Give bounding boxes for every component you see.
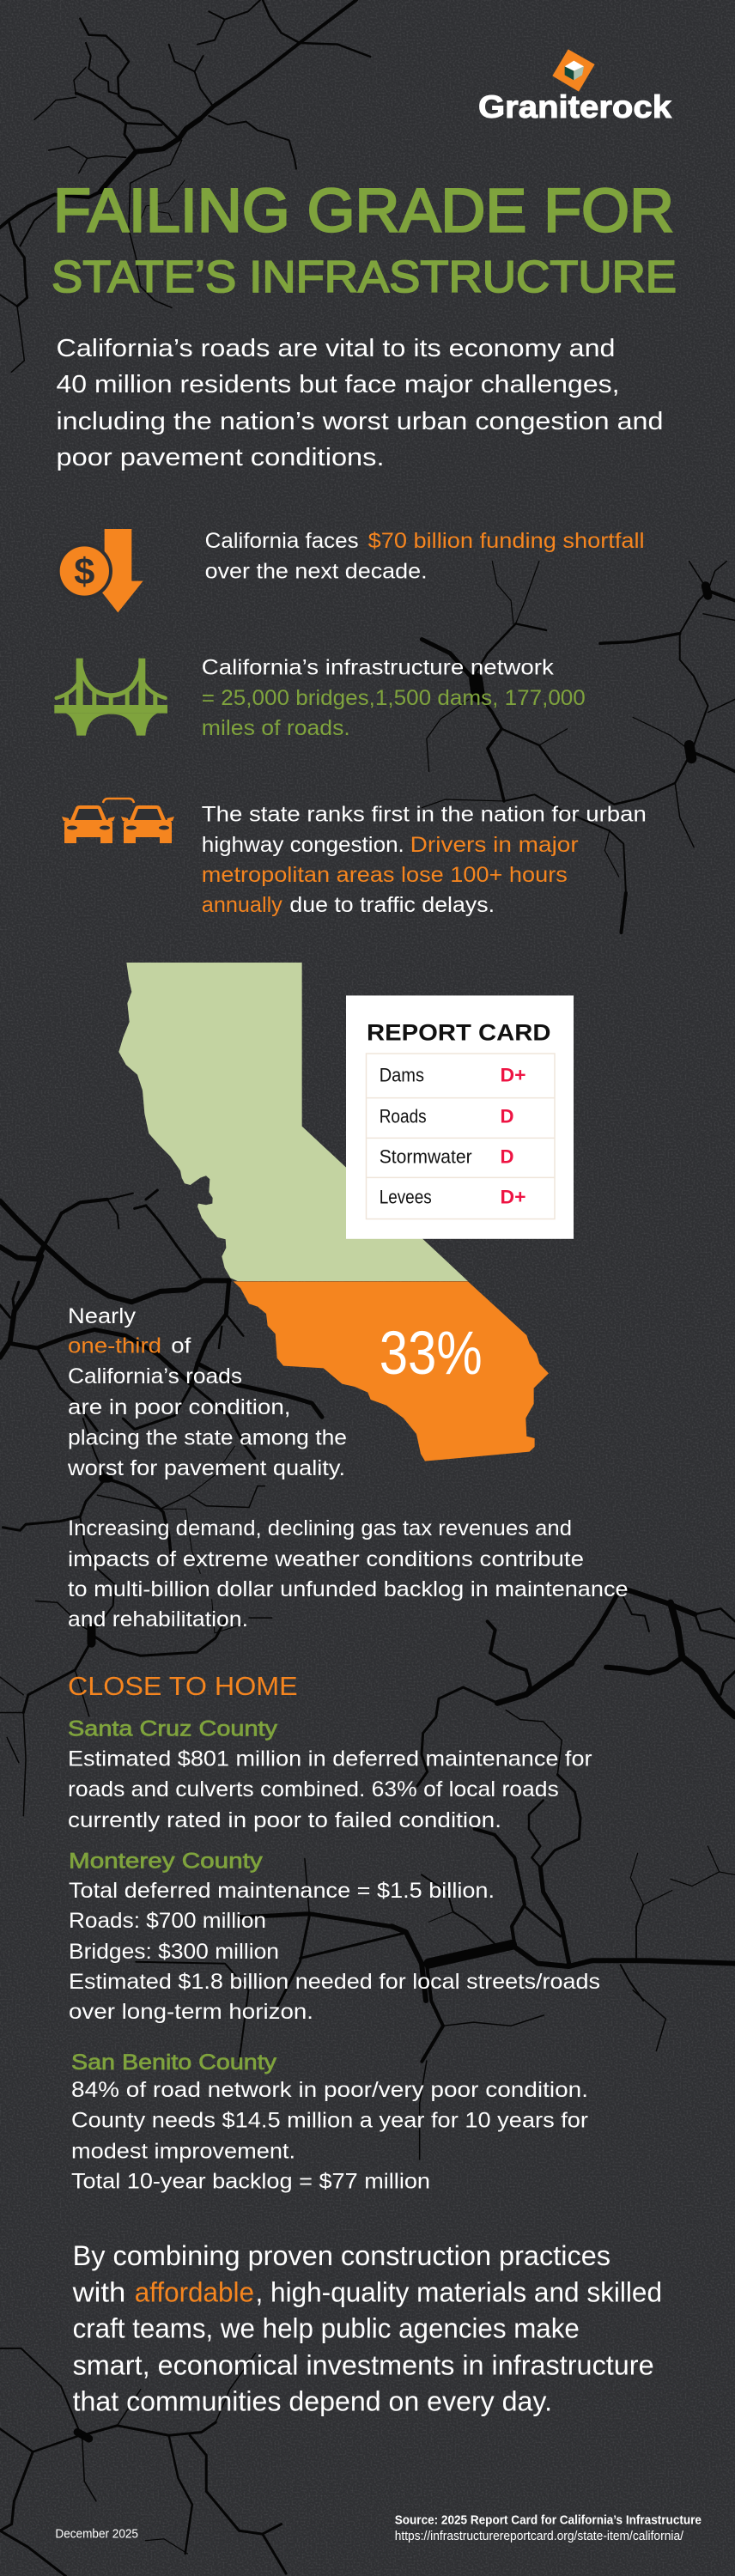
title <box>52 177 677 302</box>
heading: close to home: CLOSE TO HOME <box>68 1671 298 1701</box>
text: funding shortfall: over the next decade. <box>205 560 428 584</box>
text: urban congestion: annually <box>202 893 282 917</box>
closing statement: craft teams, we help public agencies make <box>73 2313 580 2344</box>
title: FAILING GRADE FOR <box>53 177 674 245</box>
report card table: D <box>500 1145 513 1168</box>
text: infrastructure network: miles of roads. <box>202 716 350 740</box>
text: infrastructure network <box>202 656 586 740</box>
right car <box>121 805 174 843</box>
report card table <box>366 1054 555 1219</box>
intro paragraph: 40 million residents but face major challenges, <box>57 371 620 398</box>
report card <box>346 995 574 1239</box>
county heading: Monterey County <box>69 1850 263 1874</box>
county: Santa Cruz: currently rated in poor to failed condition. <box>68 1808 501 1832</box>
icon: dollar coin with down arrow <box>57 529 143 612</box>
report card table: D+ <box>500 1186 525 1207</box>
report card table: Roads <box>380 1106 427 1127</box>
text: urban congestion: Drivers in major <box>410 833 579 857</box>
county: Monterey: Bridges: $300 million <box>69 1940 279 1964</box>
county: San Benito: Total 10-year backlog = $77 million <box>71 2169 430 2193</box>
text: infrastructure network: = 25,000 bridges,1,500 dams, 177,000 <box>202 686 586 710</box>
cracks: middle left <box>0 1190 322 1633</box>
cracks: upper right <box>422 562 735 933</box>
county: Santa Cruz: Estimated $801 million in deferred maintenance for <box>68 1747 592 1771</box>
icon: dollar coin with down arrow: $ <box>74 552 94 593</box>
closing statement: By combining proven construction practices <box>73 2240 610 2271</box>
logo: Graniterock <box>478 49 671 125</box>
text: one-third of roads: are in poor condition, <box>68 1395 290 1419</box>
text: funding shortfall: California faces <box>205 529 359 553</box>
report card table: Stormwater <box>380 1145 472 1168</box>
county: Monterey <box>69 1850 600 2024</box>
text: one-third of roads <box>67 1304 347 1480</box>
closing statement <box>72 2240 662 2417</box>
closing statement: smart, economical investments in infrastructure <box>73 2349 654 2380</box>
text: one-third of roads: worst for pavement quality. <box>67 1456 345 1480</box>
icon: bridge <box>54 659 167 736</box>
county: Monterey: Total deferred maintenance = $1.5 billion. <box>69 1879 495 1903</box>
county: Santa Cruz: roads and culverts combined. 63% of local roads <box>68 1777 559 1801</box>
closing statement: that communities depend on every day. <box>73 2386 552 2417</box>
text: urban congestion: highway congestion. <box>202 833 404 857</box>
cracks: bottom <box>0 2061 427 2576</box>
left car <box>62 805 115 843</box>
intro paragraph: including the nation’s worst urban congestion and <box>57 408 663 435</box>
cracks: lower left <box>0 1620 665 2062</box>
logo wordmark: Graniterock <box>478 89 671 125</box>
stat: 33%: 33% <box>380 1320 483 1388</box>
map: California <box>118 963 549 1461</box>
county: San Benito <box>71 2050 588 2193</box>
county: San Benito: County needs $14.5 million a year for 10 years for <box>71 2109 588 2133</box>
report card table: Levees <box>380 1186 432 1207</box>
title: STATE’S INFRASTRUCTURE <box>52 252 677 302</box>
closing statement: with <box>72 2277 125 2308</box>
text: causes of backlog: and rehabilitation. <box>68 1607 248 1631</box>
text: urban congestion: The state ranks first in the nation for urban <box>202 803 647 827</box>
cracks: middle right <box>392 1589 735 2001</box>
intro paragraph <box>57 335 663 471</box>
report card table: D+ <box>500 1064 525 1085</box>
text: infrastructure network: California’s infrastructure network <box>202 656 554 680</box>
source note <box>395 2513 702 2543</box>
county heading: San Benito County <box>71 2050 277 2075</box>
text: causes of backlog: to multi-billion dollar unfunded backlog in maintenance <box>68 1577 629 1601</box>
report card heading: REPORT CARD <box>367 1020 551 1046</box>
source note: Source: 2025 Report Card for California’s Infrastructure <box>395 2513 702 2528</box>
intro paragraph: poor pavement conditions. <box>57 444 385 471</box>
text: one-third of roads: Nearly <box>68 1304 137 1328</box>
text: one-third of roads: California’s roads <box>68 1364 242 1388</box>
county: Monterey: Roads: $700 million <box>69 1909 266 1933</box>
logo mark: orange diamond with cube <box>552 49 595 92</box>
text: urban congestion <box>202 803 647 917</box>
text: one-third of roads: placing the state among the <box>68 1426 347 1450</box>
text: causes of backlog: Increasing demand, declining gas tax revenues and <box>68 1516 572 1540</box>
closing statement: affordable <box>135 2277 254 2308</box>
county: Santa Cruz <box>68 1717 592 1832</box>
map: southern California (orange) <box>234 1281 549 1461</box>
text: urban congestion: metropolitan areas lose 100+ hours <box>202 863 568 887</box>
map: northern California (green) <box>118 963 468 1281</box>
text: one-third of roads: of <box>171 1334 191 1358</box>
county heading: Santa Cruz County <box>68 1717 278 1741</box>
county: San Benito: 84% of road network in poor/very poor condition. <box>71 2078 588 2102</box>
county: Monterey: over long-term horizon. <box>69 2000 313 2024</box>
intro paragraph: California’s roads are vital to its economy and <box>57 335 615 362</box>
date: December 2025 <box>55 2527 138 2542</box>
icon: cars in traffic <box>62 799 174 843</box>
text: urban congestion: due to traffic delays. <box>289 893 495 917</box>
text: causes of backlog <box>68 1516 629 1631</box>
county: San Benito: modest improvement. <box>71 2140 295 2164</box>
text: funding shortfall <box>205 529 645 584</box>
source note: https://infrastructurereportcard.org/state-item/california/ <box>395 2529 684 2543</box>
text: one-third of roads: one-third <box>68 1334 161 1358</box>
text: funding shortfall: $70 billion funding shortfall <box>368 529 645 553</box>
report card table: D <box>500 1106 513 1127</box>
cracks: top left <box>0 0 370 372</box>
closing statement: , high-quality materials and skilled <box>256 2277 662 2308</box>
report card table: Dams <box>380 1064 424 1085</box>
county: Monterey: Estimated $1.8 billion needed for local streets/roads <box>69 1970 600 1994</box>
text: causes of backlog: impacts of extreme weather conditions contribute <box>68 1547 584 1571</box>
